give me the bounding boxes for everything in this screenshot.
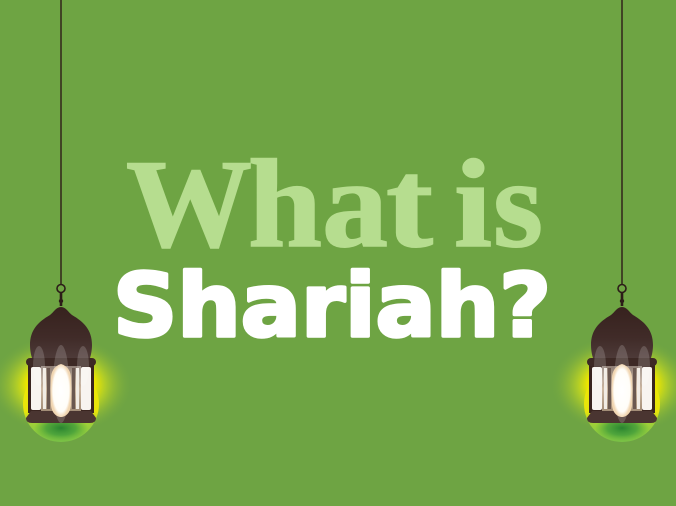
lantern cornice bbox=[26, 358, 96, 366]
lantern translucent light beams bbox=[594, 345, 650, 423]
lantern ring and finial bbox=[57, 284, 65, 306]
heading: What is: s bbox=[493, 135, 543, 274]
lantern cord bbox=[621, 0, 623, 284]
heading: What is bbox=[126, 135, 543, 274]
lantern dome bbox=[30, 307, 92, 358]
lantern pool shadow bbox=[34, 415, 88, 441]
lantern pool shadow bbox=[595, 415, 649, 441]
heading: What is: t bbox=[386, 135, 433, 274]
lantern light pool bbox=[23, 366, 99, 442]
lantern translucent light beams bbox=[33, 345, 89, 423]
lantern cord bbox=[60, 0, 62, 284]
lantern ring and finial bbox=[618, 284, 626, 306]
heading: What is: h bbox=[248, 135, 322, 274]
lantern base bbox=[26, 411, 96, 423]
lantern cornice bbox=[587, 358, 657, 366]
lantern flame bbox=[51, 364, 71, 417]
lantern: right bbox=[550, 0, 676, 442]
lantern: left bbox=[0, 0, 133, 442]
heading: What is: i bbox=[454, 135, 492, 274]
lantern body bbox=[589, 365, 655, 413]
heading: What is: W bbox=[126, 135, 252, 274]
lantern dome bbox=[591, 307, 653, 358]
lantern flame bbox=[612, 364, 632, 417]
lantern glow bbox=[0, 335, 133, 435]
lantern light pool bbox=[584, 366, 660, 442]
lantern body bbox=[28, 365, 94, 413]
heading: Shariah?: Shariah? bbox=[113, 255, 551, 357]
heading: What is: a bbox=[322, 135, 388, 274]
lantern glow bbox=[550, 335, 676, 435]
lantern base bbox=[587, 411, 657, 423]
